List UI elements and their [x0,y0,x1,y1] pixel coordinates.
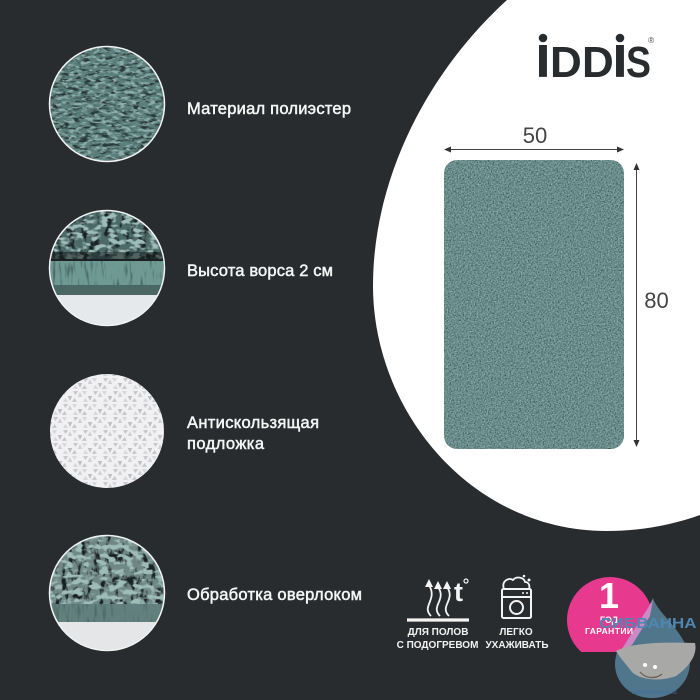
watermark: Сибванна: www.sibvanna.ru [630,690,677,696]
caption: easy care: ЛЕГКО [499,627,533,638]
warranty badge: 1 [599,575,619,616]
caption: heated floors: С ПОДОГРЕВОМ [397,640,478,651]
caption: easy care [485,627,549,651]
feature 1 label: Материал полиэстер [187,100,351,118]
caption: heated floors [397,627,478,651]
logo: iDDiS: D [582,38,614,87]
dimension: width 50 [444,123,624,152]
logo: iDDiS: D [550,38,582,87]
logo: iDDiS: S [626,38,651,87]
caption: heated floors: ДЛЯ ПОЛОВ [408,627,468,638]
warranty badge [567,577,653,652]
dimension: width 50: 50 [523,123,547,148]
watermark: Сибванна [600,615,697,696]
logo: iDDiS: ® [648,35,655,45]
logo: iDDiS [535,23,655,90]
logo: iDDiS: i [535,23,551,90]
feature 2 label: Высота ворса 2 см [187,262,333,280]
logo: iDDiS: i [612,23,628,90]
watermark: Сибванна: СИБВАННА [600,615,697,632]
warranty badge: ГОД [600,615,619,625]
feature 2: pile height swatch [48,209,166,327]
watermark: drop behind badge [615,598,690,698]
warranty badge: ГАРАНТИИ [585,626,633,636]
caption: easy care: УХАЖИВАТЬ [485,640,549,651]
feature 3 label: подложка [187,435,265,453]
product: bath mat [444,160,624,449]
feature 1: material swatch [48,45,166,163]
dimension: height 80: 80 [644,288,669,313]
feature 4 label: Обработка оверлоком [187,586,362,604]
icon: heated floor [407,577,469,620]
icon: heated floor: t [454,577,463,607]
dimension: height 80 [634,163,669,447]
feature 3 label [187,414,319,453]
feature 3: anti-slip backing swatch [48,372,166,490]
icon: washing machine [502,575,531,618]
white product panel [373,0,700,531]
feature 3 label: Антискользящая [187,414,319,432]
feature 4: overlock edge swatch [48,534,166,654]
